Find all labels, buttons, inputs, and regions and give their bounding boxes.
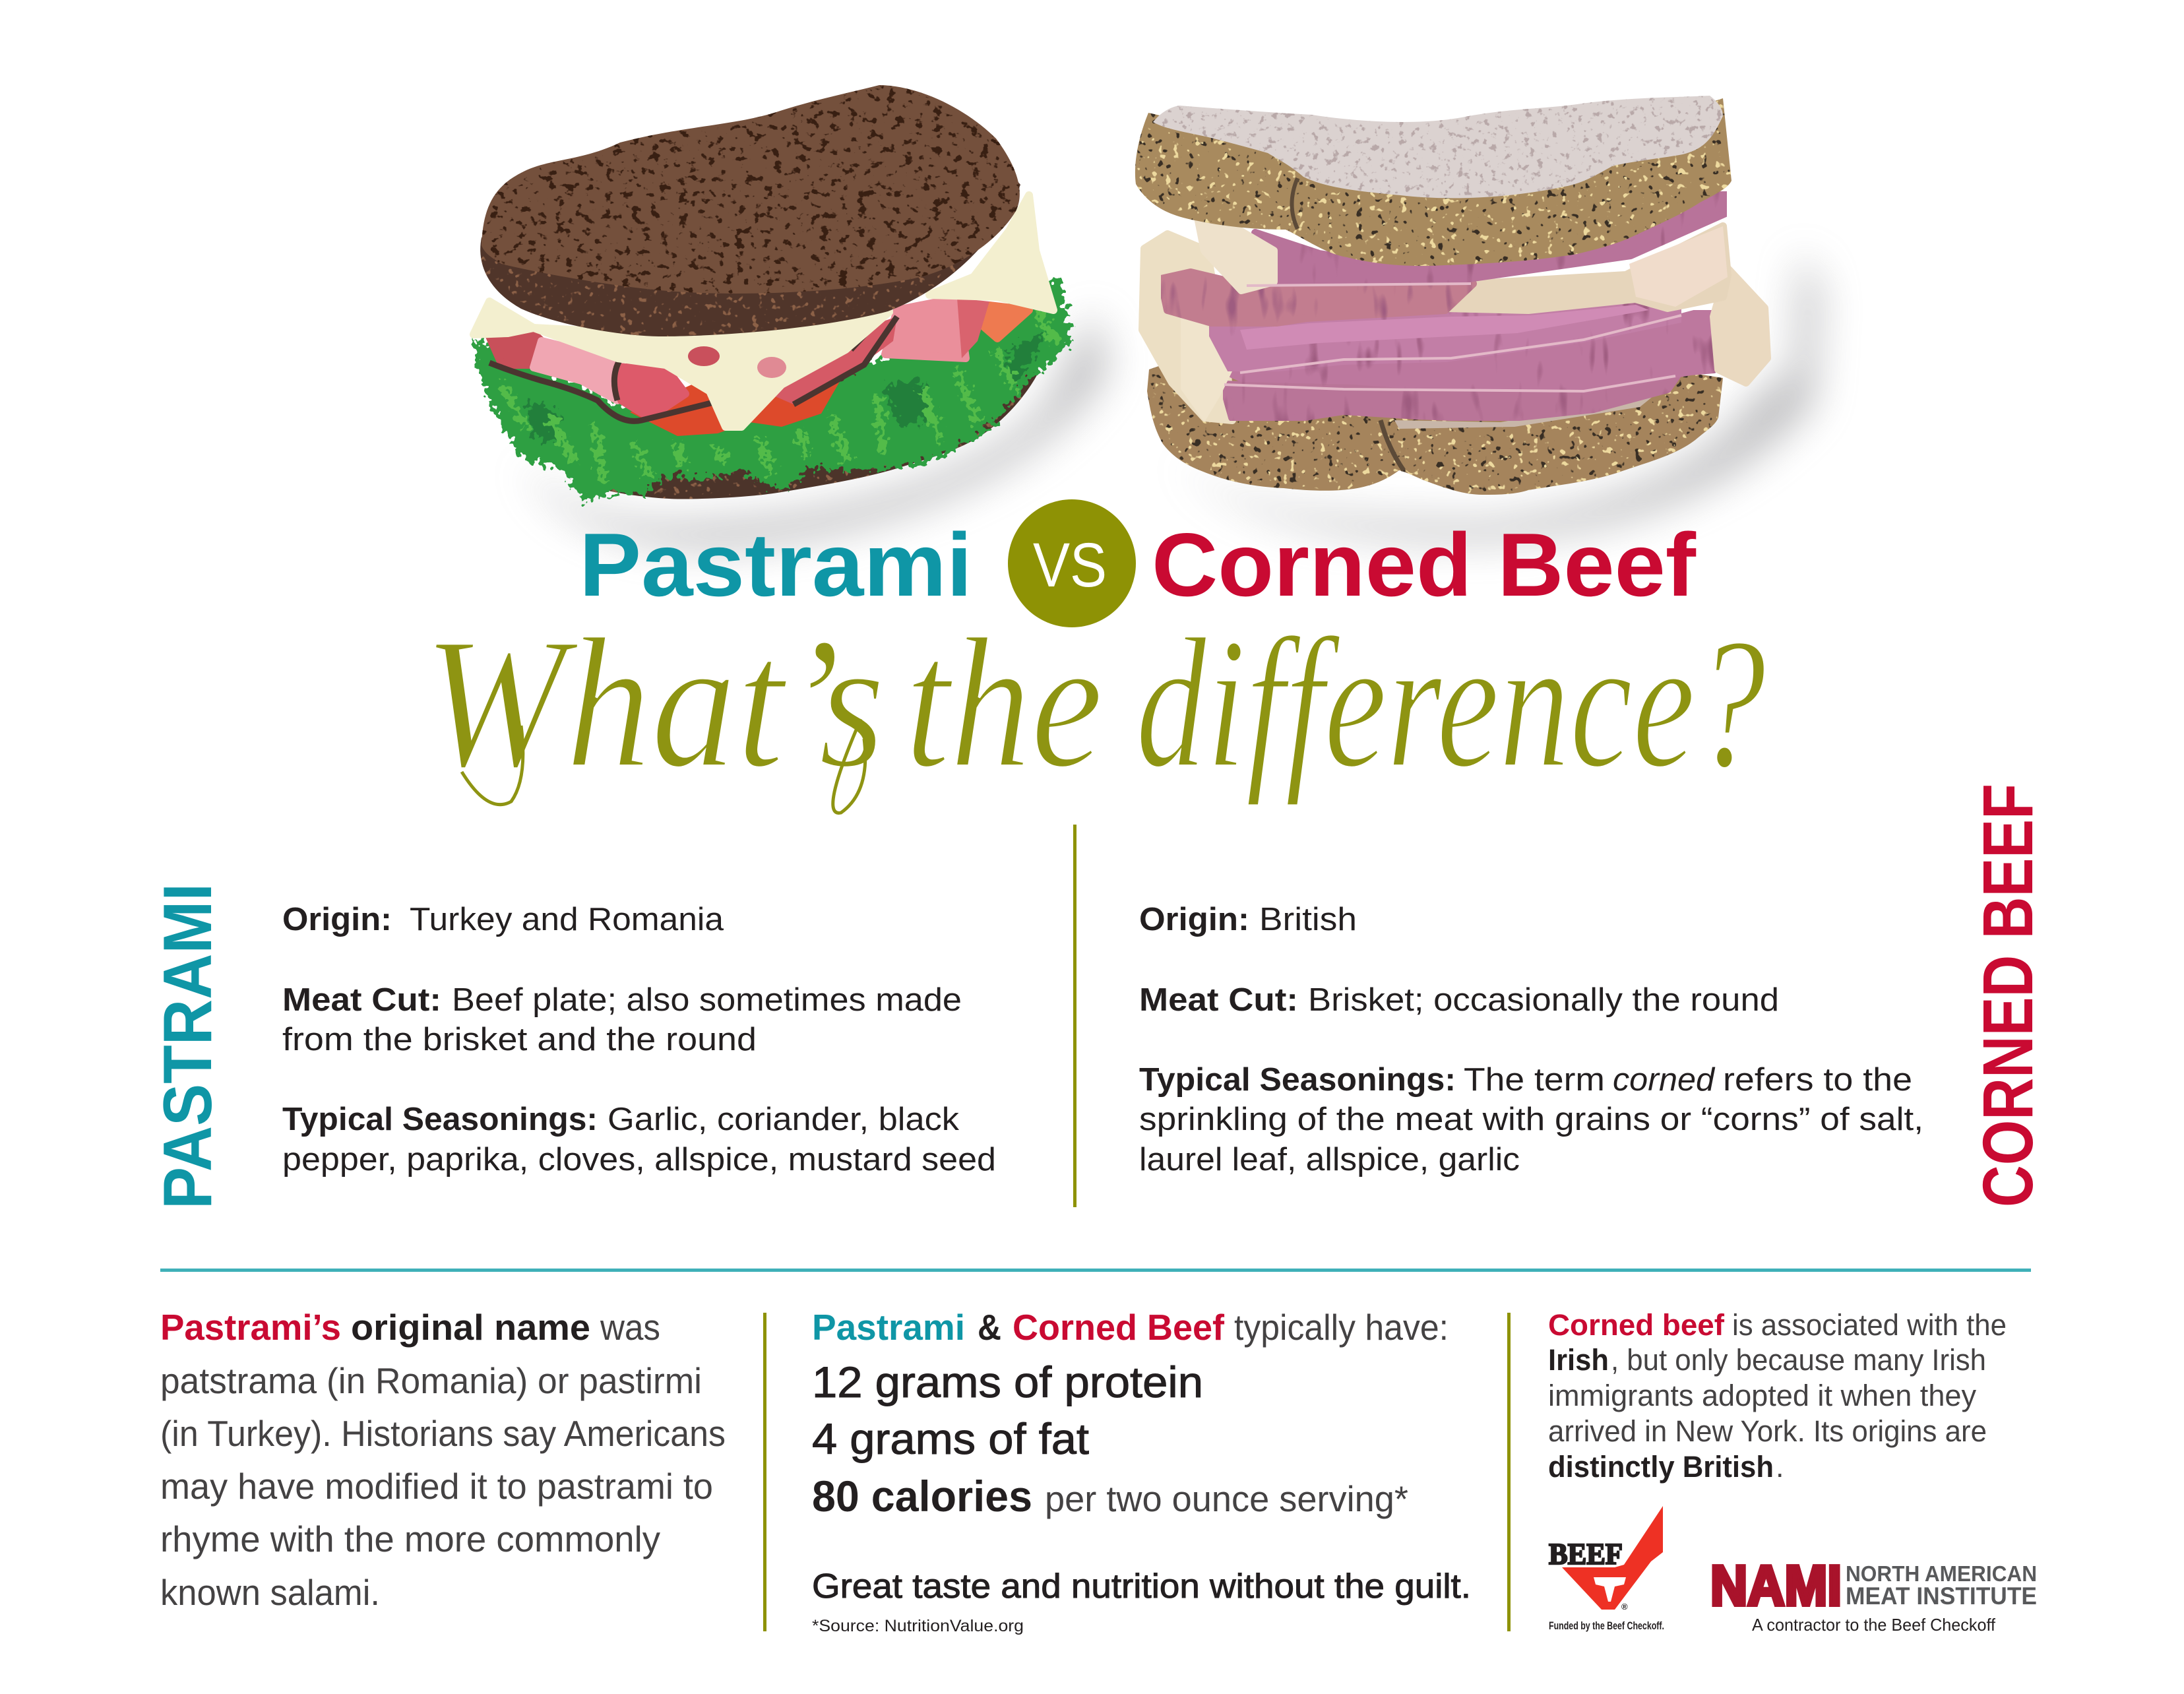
lettuce xyxy=(474,277,1071,503)
period: . xyxy=(1776,1450,1784,1484)
bold phrase: original name xyxy=(351,1307,590,1348)
calories: 80 calories xyxy=(812,1472,1032,1521)
right pastrami edge xyxy=(957,298,989,358)
meat fat lines xyxy=(1224,284,1681,391)
meat layer B xyxy=(1161,272,1473,327)
meat layer A xyxy=(1255,191,1727,280)
meat cut value: Beef plate; also sometimes made xyxy=(452,982,962,1018)
line 2: patstrama (in Romania) or pastirmi xyxy=(160,1360,702,1401)
tomato xyxy=(630,369,841,436)
title: Corned Beef: Corned Beef xyxy=(1152,515,1697,615)
pastrami inner fold xyxy=(617,367,685,418)
image: corned beef sandwich xyxy=(1135,96,1767,495)
title: Pastrami: Pastrami xyxy=(579,515,972,615)
heading word: the: the xyxy=(905,600,1103,806)
tomato right slice xyxy=(978,305,1029,338)
logo: Beef checkoff xyxy=(1549,1506,1664,1632)
registered mark: ® xyxy=(1621,1602,1628,1612)
image: pastrami sandwich xyxy=(474,85,1071,503)
seasonings value line 2: sprinkling of the meat with grains or “corns” of salt, xyxy=(1139,1102,1923,1137)
rye top crust xyxy=(480,172,1020,336)
nutrition heading: ampersand: & xyxy=(978,1307,1001,1348)
meat cut label: Meat Cut: xyxy=(1139,982,1298,1018)
vs badge xyxy=(1008,499,1136,627)
highlighted name: Corned beef xyxy=(1548,1308,1725,1342)
origin value: British xyxy=(1259,902,1357,937)
heading: What's the difference? xyxy=(423,600,1766,806)
contractor note: A contractor to the Beef Checkoff xyxy=(1752,1615,1996,1635)
tagline: Great taste and nutrition without the guilt. xyxy=(812,1567,1471,1606)
line 1 end: was xyxy=(600,1307,660,1348)
badge label: VS xyxy=(1033,530,1107,600)
center divider xyxy=(1073,825,1076,1207)
lettuce shading xyxy=(501,310,1055,485)
panel: nutrition xyxy=(812,1307,1471,1635)
dark lettuce folds xyxy=(528,330,1045,442)
origin label: Origin: xyxy=(282,902,392,937)
line 5: rhyme with the more commonly xyxy=(160,1519,660,1559)
pastrami sandwich shadow xyxy=(521,310,1108,548)
nutrition heading: Corned Beef: Corned Beef xyxy=(1013,1307,1225,1348)
top bread slice face xyxy=(1153,96,1723,198)
highlighted name: Pastrami’s xyxy=(160,1307,341,1348)
right pastrami slice xyxy=(885,298,966,358)
origin label: Origin: xyxy=(1139,902,1249,937)
seasonings value end: refers to the xyxy=(1723,1062,1912,1098)
horizontal divider xyxy=(160,1269,2031,1272)
panel: pastrami facts xyxy=(282,902,996,1177)
right fat highlight xyxy=(1629,226,1728,307)
rye top bread face xyxy=(482,85,1020,294)
panel: sandwich photos xyxy=(474,85,1821,548)
North American: NORTH AMERICAN xyxy=(1846,1561,2037,1586)
panel: corned beef facts xyxy=(1139,902,1923,1177)
pastrami fold xyxy=(534,341,621,400)
nutrition heading: Pastrami: Pastrami xyxy=(812,1307,965,1348)
steer head cutout xyxy=(1594,1577,1626,1602)
bottom multigrain bread xyxy=(1147,356,1723,495)
line 3: immigrants adopted it when they xyxy=(1548,1379,1976,1412)
meat cut label: Meat Cut: xyxy=(282,982,441,1018)
vertical label: PASTRAMI: PASTRAMI xyxy=(150,883,226,1209)
source: *Source: NutritionValue.org xyxy=(812,1617,1024,1635)
middle pastrami fold xyxy=(774,317,897,404)
bottom rye bread xyxy=(582,343,1038,499)
bold Irish: Irish xyxy=(1548,1343,1609,1377)
logo: NAMI xyxy=(1710,1555,2037,1635)
meat layer C xyxy=(1209,301,1681,371)
heading word: difference?: difference? xyxy=(1136,600,1766,806)
nutrition heading: typically have: typically have: xyxy=(1234,1307,1449,1348)
heading flourishes xyxy=(462,719,865,813)
bread crumb strip xyxy=(1394,396,1654,429)
cheese holes xyxy=(688,346,786,378)
top bread crust xyxy=(1135,98,1732,266)
left pastrami chunk xyxy=(489,330,542,365)
meat cut value: Brisket; occasionally the round xyxy=(1308,982,1779,1018)
origin value: Turkey and Romania xyxy=(410,902,724,937)
Meat Institute: MEAT INSTITUTE xyxy=(1846,1583,2037,1610)
funded by note: Funded by the Beef Checkoff. xyxy=(1549,1619,1664,1632)
protein: 12 grams of protein xyxy=(812,1358,1203,1406)
line 4: may have modified it to pastrami to xyxy=(160,1466,713,1507)
upper fat blob xyxy=(1198,218,1274,290)
bright lettuce ruffles xyxy=(501,310,1055,485)
heading word: What's: What’s xyxy=(423,600,885,806)
NAMI wordmark: NAMI xyxy=(1710,1555,1842,1617)
seasonings label: Typical Seasonings: xyxy=(282,1102,598,1137)
meat top highlight C xyxy=(1240,305,1649,350)
red check mark xyxy=(1562,1506,1663,1610)
seasonings value start: The term xyxy=(1464,1062,1605,1098)
line 2 end: , but only because many Irish xyxy=(1611,1343,1986,1377)
vertical label: CORNED BEEF: CORNED BEEF xyxy=(1968,784,2047,1207)
seasonings label: Typical Seasonings: xyxy=(1139,1062,1456,1098)
meat cut value line 2: from the brisket and the round xyxy=(282,1022,757,1057)
fat: 4 grams of fat xyxy=(812,1414,1089,1463)
bottom bread crease xyxy=(1381,420,1404,470)
line 1 end: is associated with the xyxy=(1732,1308,2007,1342)
panel: pastrami's original name xyxy=(160,1307,726,1613)
line 3: (in Turkey). Historians say Americans xyxy=(160,1413,726,1454)
seasonings value line 2: pepper, paprika, cloves, allspice, mustard seed xyxy=(282,1142,996,1177)
corned beef sandwich shadow xyxy=(1174,158,1821,541)
pepper crust edges xyxy=(489,310,897,421)
panel: corned beef origins xyxy=(1548,1308,2007,1484)
column divider 2 xyxy=(1507,1313,1511,1631)
right cheese xyxy=(929,195,1053,310)
swiss cheese xyxy=(474,301,889,427)
bold distinctly British: distinctly British xyxy=(1548,1450,1774,1484)
hole 1 xyxy=(688,346,720,366)
seasonings italic word: corned xyxy=(1613,1062,1716,1098)
top bread crease xyxy=(1292,178,1297,229)
column divider 1 xyxy=(763,1313,766,1631)
line 4: arrived in New York. Its origins are xyxy=(1548,1414,1987,1448)
line 6: known salami. xyxy=(160,1572,380,1613)
serving note: per two ounce serving* xyxy=(1045,1478,1408,1519)
BEEF wordmark: BEEF xyxy=(1549,1537,1623,1571)
meat layer D xyxy=(1232,310,1716,389)
badge circle xyxy=(1008,499,1136,627)
seasonings value line 3: laurel leaf, allspice, garlic xyxy=(1139,1142,1520,1177)
far right fat xyxy=(1714,268,1767,383)
seasonings value: Garlic, coriander, black xyxy=(608,1102,960,1137)
middle fat band xyxy=(1445,226,1728,310)
meat layers xyxy=(1223,310,1716,421)
meat layer E xyxy=(1223,376,1677,421)
left fat edge xyxy=(1142,234,1232,420)
hole 2 xyxy=(757,357,786,378)
lower left fat flap xyxy=(1181,310,1232,422)
